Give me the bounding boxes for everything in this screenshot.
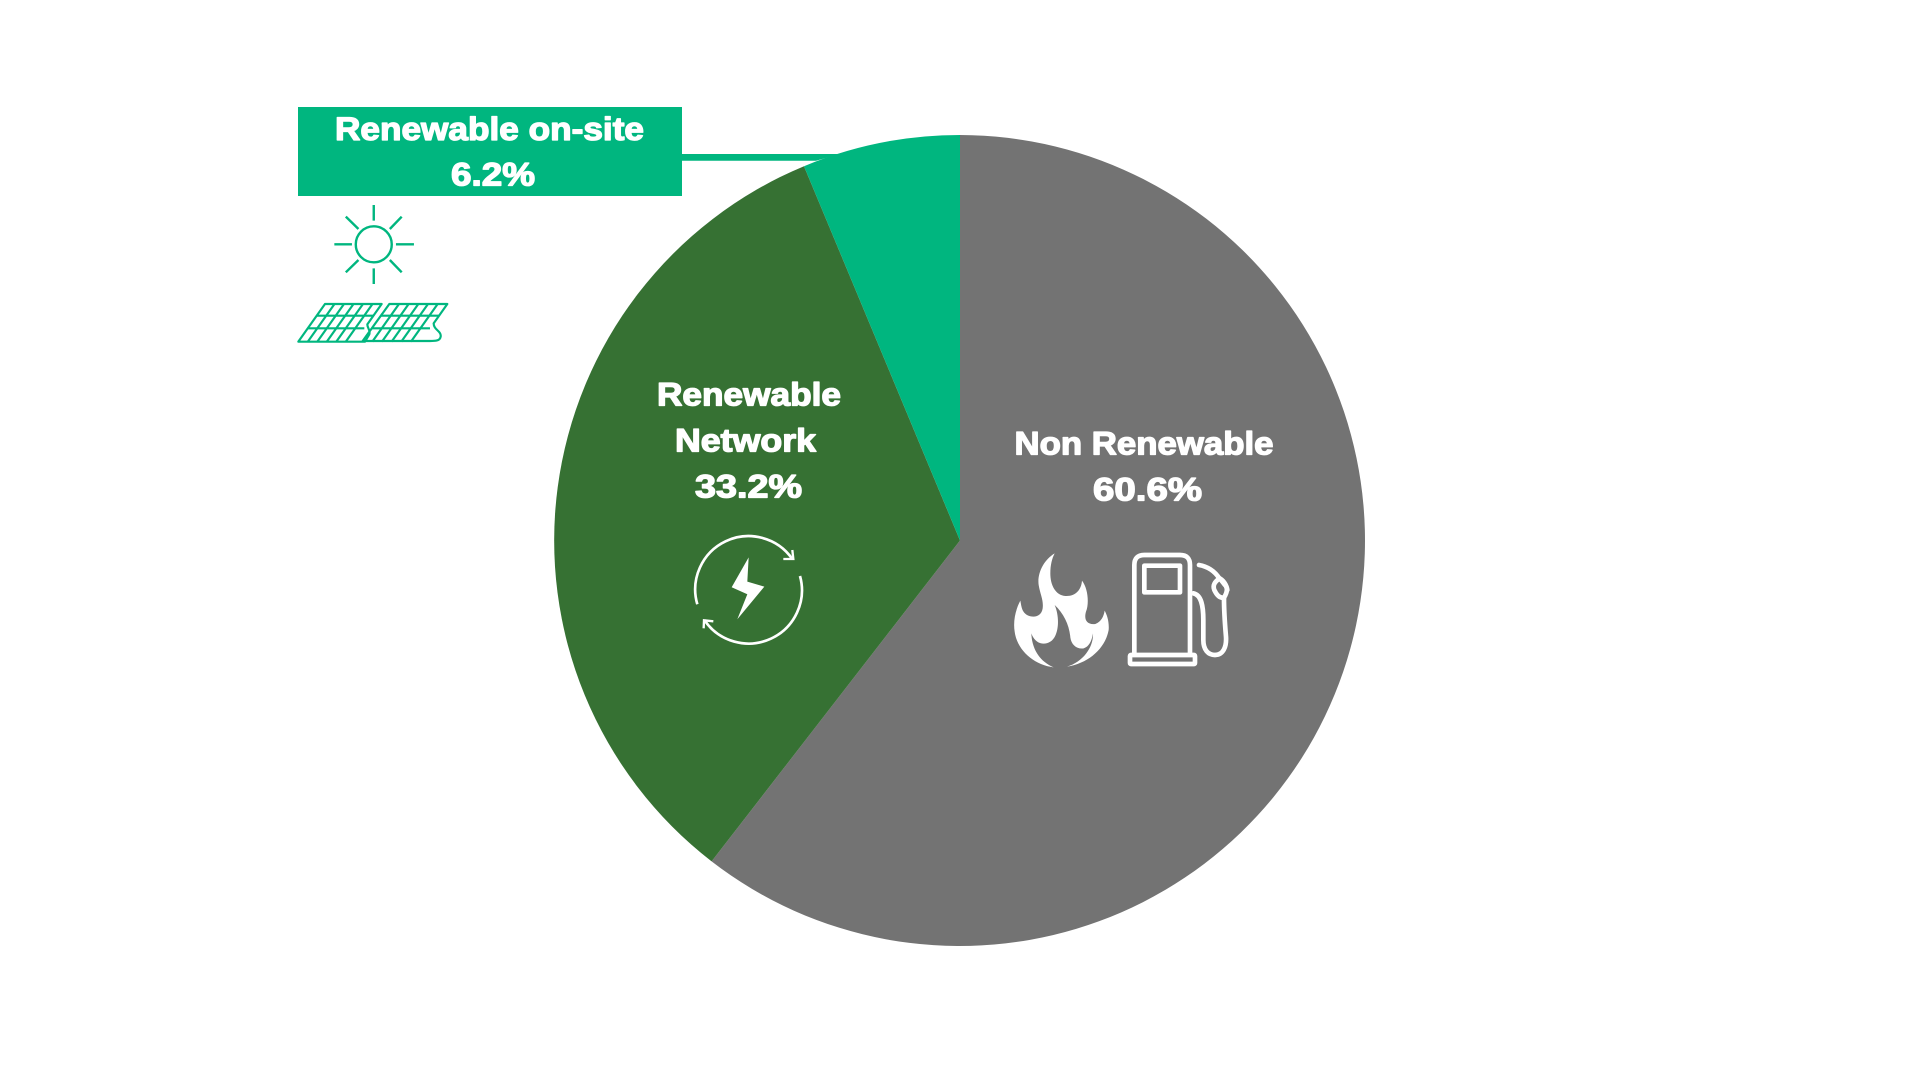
icon: solar panels [298, 304, 447, 342]
label: renewable network: Network [675, 423, 816, 459]
callout: renewable on-site [298, 107, 682, 196]
slice: non renewable 60.6% [712, 135, 1365, 946]
icon: fuel pump [1130, 555, 1227, 664]
icon: sun [334, 205, 414, 284]
connector line from callout to slice [682, 154, 840, 161]
label: renewable network: 33.2% [695, 469, 802, 505]
pie chart [554, 135, 1365, 946]
callout background [298, 107, 682, 196]
callout value: 6.2% [451, 157, 535, 193]
slice: renewable on-site 6.2% [804, 135, 960, 540]
label: renewable network: Renewable [657, 377, 841, 413]
label: non renewable [1014, 425, 1274, 508]
label: renewable network [657, 377, 841, 505]
label: non renewable: Non Renewable [1014, 425, 1274, 461]
callout label: Renewable on-site [335, 111, 644, 147]
label: non renewable: 60.6% [1093, 472, 1202, 508]
icon: renewable energy cycle [695, 536, 802, 644]
icon: flame [1014, 553, 1109, 667]
slice: renewable network 33.2% [554, 166, 960, 861]
